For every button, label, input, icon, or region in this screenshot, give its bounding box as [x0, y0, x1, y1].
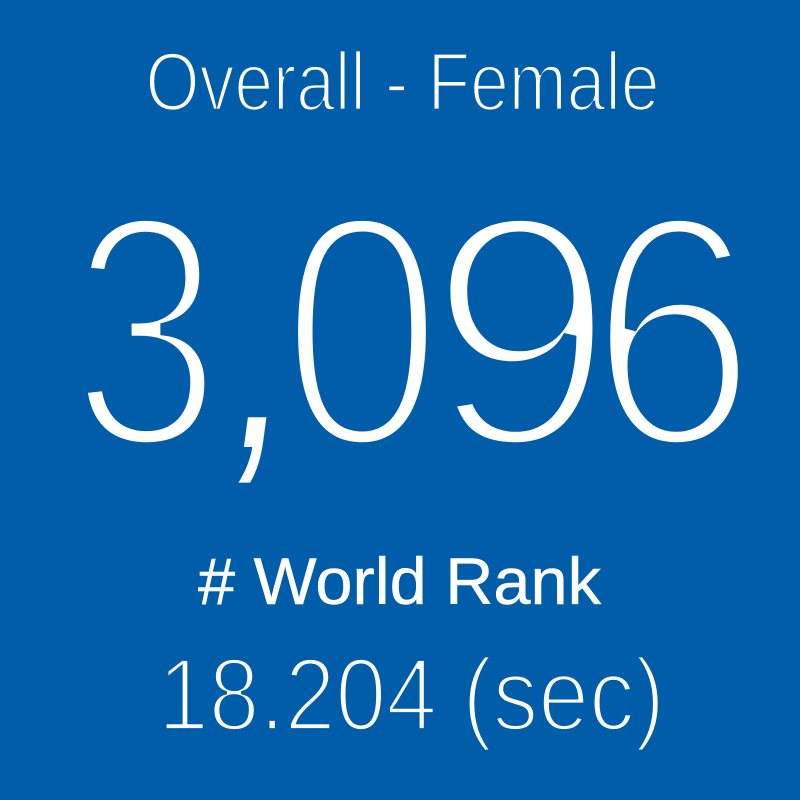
- heading: Overall - Female: Overall - Female: [146, 35, 660, 128]
- label: # World Rank: # World Rank: [198, 544, 602, 618]
- big number: 3,096: 3: [72, 146, 222, 516]
- big number: 3,096: [72, 146, 757, 516]
- big number: 3,096: 9: [428, 146, 615, 516]
- big number: 3,096: 0: [281, 146, 443, 516]
- big number: 3,096: ,: [235, 195, 289, 506]
- value: 18.204 (sec): 18.204 (sec): [158, 637, 665, 752]
- big number: 3,096: 6: [589, 146, 757, 516]
